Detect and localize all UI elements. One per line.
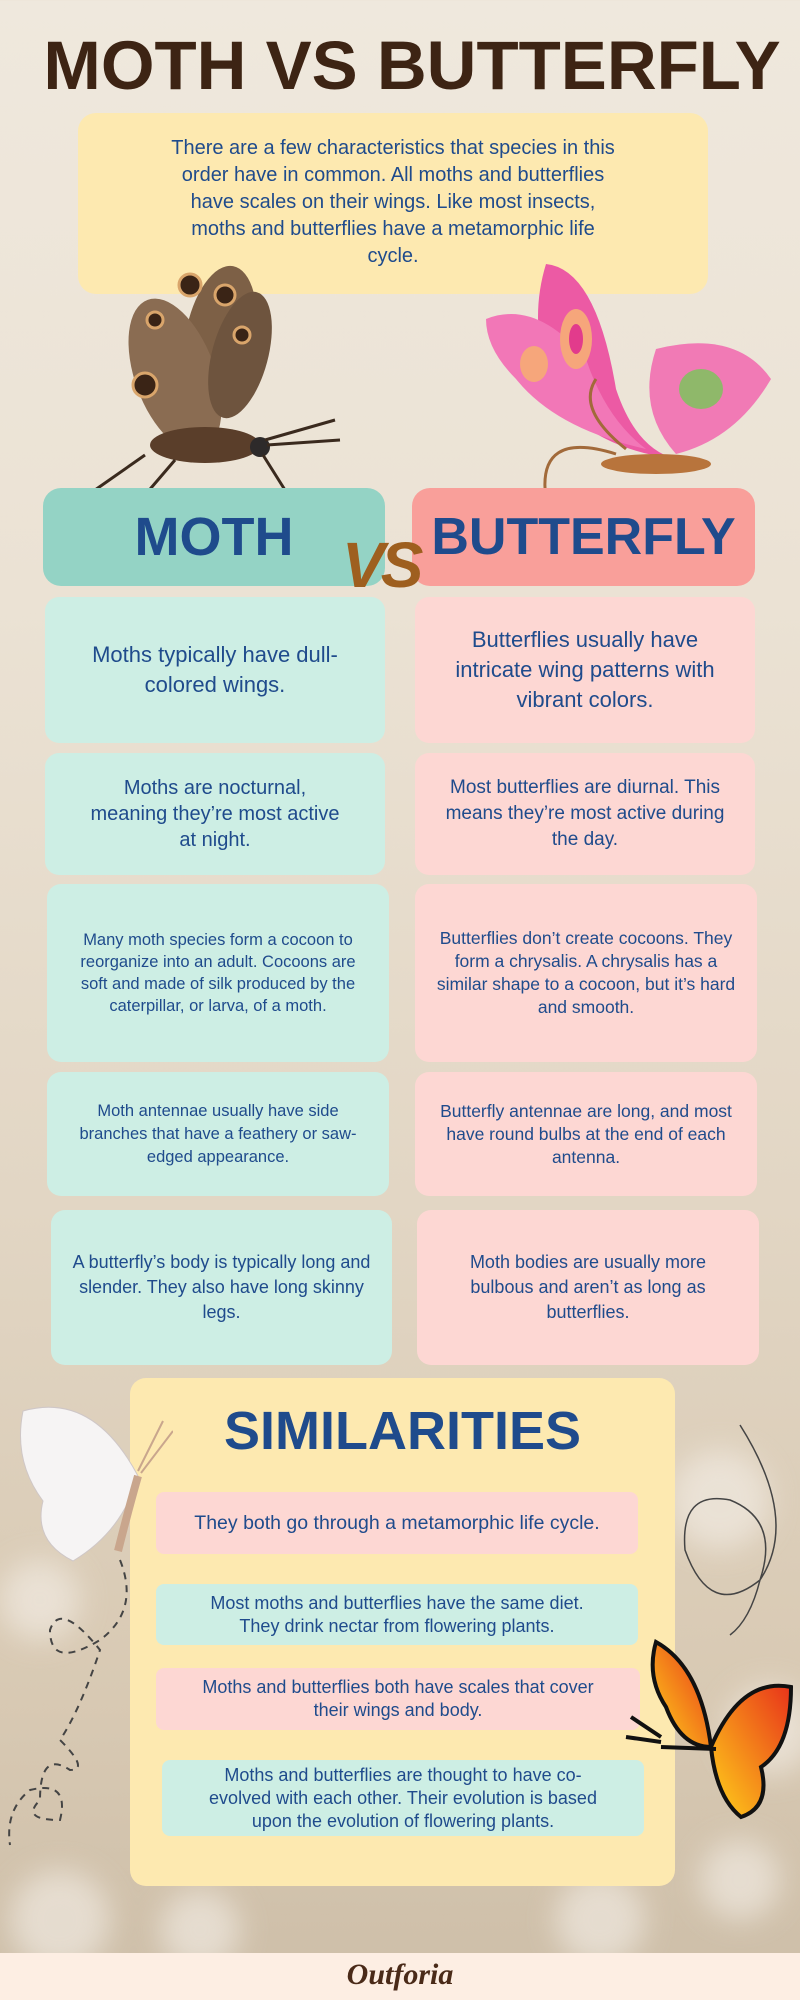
butterfly card 4 <box>415 1072 757 1196</box>
similarity 2 <box>156 1584 638 1645</box>
panel: moth header: MOTH <box>135 507 293 567</box>
moth card 5 <box>51 1210 392 1365</box>
butterfly card 3: Butterflies don’t create cocoons. They form a chrysalis. A chrysalis has a similar shape to a cocoon, but it’s hard and smooth. <box>437 928 735 1017</box>
logo: Outforia: Outforia <box>347 1958 453 1991</box>
panel: butterfly header: BUTTERFLY <box>431 508 736 566</box>
butterfly card 5 <box>417 1210 759 1365</box>
moth card 1 <box>45 597 385 743</box>
curly line <box>684 1424 777 1636</box>
similarities heading: SIMILARITIES <box>224 1401 581 1461</box>
similarity 1: They both go through a metamorphic life cycle. <box>194 1512 600 1534</box>
title: MOTH VS BUTTERFLY <box>43 27 781 104</box>
VS label: VS <box>342 529 419 601</box>
moth card 4: Moth antennae usually have side branches that have a feathery or saw-edged appearance. <box>80 1102 356 1166</box>
moth card 5: A butterfly’s body is typically long and slender. They also have long skinny legs. <box>73 1252 370 1322</box>
butterfly card 1 <box>415 597 755 743</box>
butterfly card 2: Most butterflies are diurnal. This means they’re most active during the day. <box>446 777 724 850</box>
butterfly card 5: Moth bodies are usually more bulbous and aren’t as long as butterflies. <box>470 1252 706 1322</box>
similarity 3: Moths and butterflies both have scales that cover their wings and body. <box>202 1677 594 1720</box>
footer <box>0 1953 800 2000</box>
similarity 3 <box>156 1668 640 1730</box>
moth card 2 <box>45 753 385 875</box>
moth card 2: Moths are nocturnal, meaning they’re most active at night. <box>90 777 340 851</box>
dashed flight path <box>8 1560 128 1846</box>
icon: pink butterfly <box>486 264 771 488</box>
similarity 4: Moths and butterflies are thought to have co-evolved with each other. Their evolution is based upon the evolution of flowering plants. <box>209 1764 597 1830</box>
icon: brown moth <box>95 266 340 488</box>
moth card 1: Moths typically have dull-colored wings. <box>92 642 338 697</box>
butterfly card 2 <box>415 753 755 875</box>
panel: similarities <box>130 1378 675 1886</box>
moth card 3 <box>47 884 389 1062</box>
intro box: There are a few characteristics that species in this order have in common. All moths and butterflies have scales on their wings. Like most insects, moths and butterflies have a metamorphic life cycle. <box>171 137 615 267</box>
butterfly card 3 <box>415 884 757 1062</box>
butterfly card 1: Butterflies usually have intricate wing patterns with vibrant colors. <box>455 627 715 712</box>
similarity 1 <box>156 1492 638 1554</box>
intro box <box>78 113 708 294</box>
moth card 4 <box>47 1072 389 1196</box>
icon: orange monarch butterfly <box>626 1639 793 1820</box>
panel: butterfly header <box>412 488 755 586</box>
similarity 2: Most moths and butterflies have the same diet. They drink nectar from flowering plants. <box>210 1592 584 1636</box>
panel: moth header <box>43 488 385 586</box>
moth card 3: Many moth species form a cocoon to reorganize into an adult. Cocoons are soft and made of silk produced by the caterpillar, or larva, of a moth. <box>80 931 356 1015</box>
icon: white butterfly <box>20 1406 173 1562</box>
background flowers <box>0 1445 800 1953</box>
butterfly card 4: Butterfly antennae are long, and most have round bulbs at the end of each antenna. <box>440 1100 732 1166</box>
similarity 4 <box>162 1760 644 1836</box>
